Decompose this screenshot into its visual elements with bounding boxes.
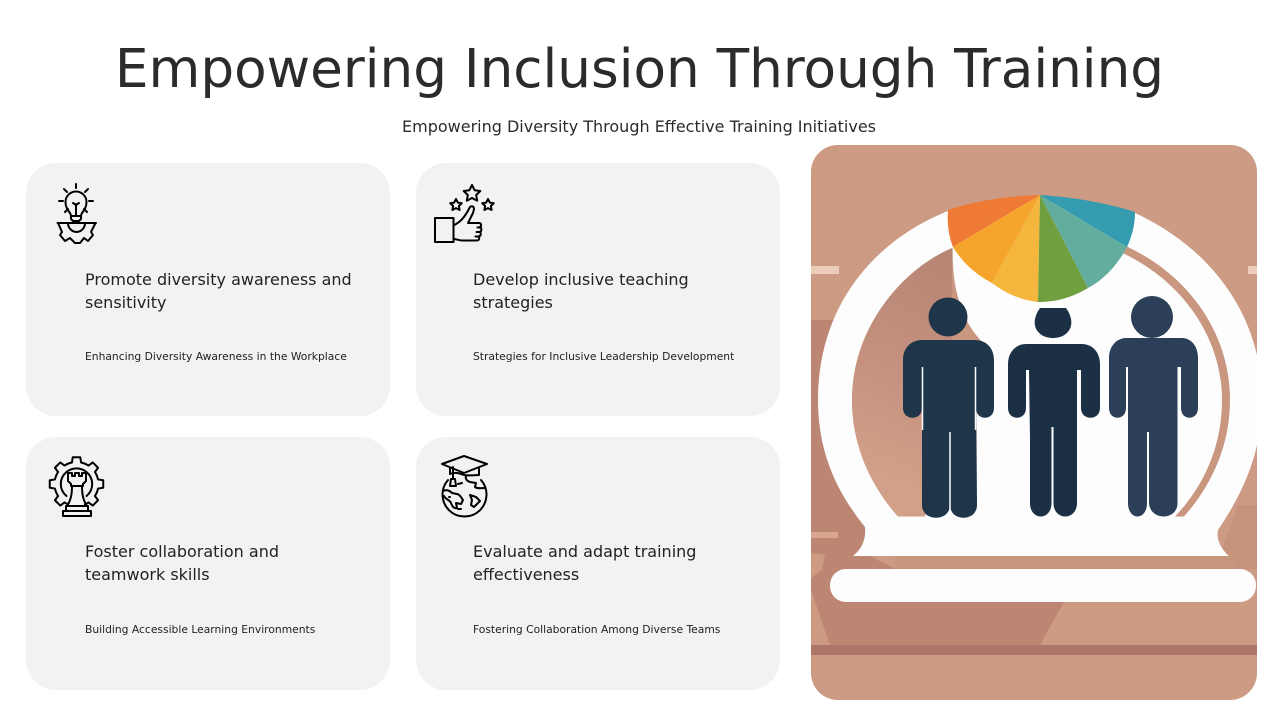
heading: inclusive teaching strategies: Develop inclusive teaching [473, 270, 689, 289]
panel: promote diversity awareness [26, 163, 390, 416]
icon: light bulb over gear [56, 183, 97, 244]
heading: evaluate and adapt training: Evaluate and adapt training [473, 542, 696, 561]
figure: left person [903, 298, 994, 518]
subtitle: Empowering Diversity Through Effective Training Initiatives [402, 117, 876, 136]
caption: fostering collaboration: Fostering Collaboration Among Diverse Teams [473, 622, 720, 636]
icon: graduation cap on globe [441, 455, 488, 518]
heading: promote diversity awareness [85, 270, 352, 312]
caption: enhancing diversity awareness: Enhancing Diversity Awareness in the Workplace [85, 350, 347, 362]
heading: evaluate and adapt training [473, 542, 696, 584]
illustration: diverse people under colour wheel [811, 145, 1257, 700]
heading: promote diversity awareness: Promote diversity awareness and [85, 270, 352, 289]
heading: inclusive teaching strategies [473, 270, 689, 312]
panel: collaboration and teamwork [26, 437, 390, 690]
figure: right person [1109, 296, 1198, 516]
icon: thumbs up with stars [434, 184, 495, 243]
heading: collaboration and teamwork [85, 542, 279, 584]
heading: evaluate and adapt training: effectiveness [473, 565, 579, 584]
white pedestal bar [830, 569, 1256, 602]
title: Empowering Inclusion Through Training [115, 38, 1164, 100]
heading: collaboration and teamwork: Foster collaboration and [85, 542, 279, 561]
heading: promote diversity awareness: sensitivity [85, 293, 166, 312]
panel: evaluate and adapt training [416, 437, 780, 690]
figure: middle person [1008, 308, 1100, 516]
heading: inclusive teaching strategies: strategies [473, 293, 553, 312]
caption: inclusive leadership: Strategies for Inclusive Leadership Development [473, 350, 734, 362]
caption: accessible learning: Building Accessible Learning Environments [85, 622, 315, 636]
chart: colour wheel segments [948, 195, 1135, 302]
heading: collaboration and teamwork: teamwork skills [85, 565, 210, 584]
panel: inclusive teaching strategies [416, 163, 780, 416]
icon: chess rook in gear [48, 456, 104, 517]
